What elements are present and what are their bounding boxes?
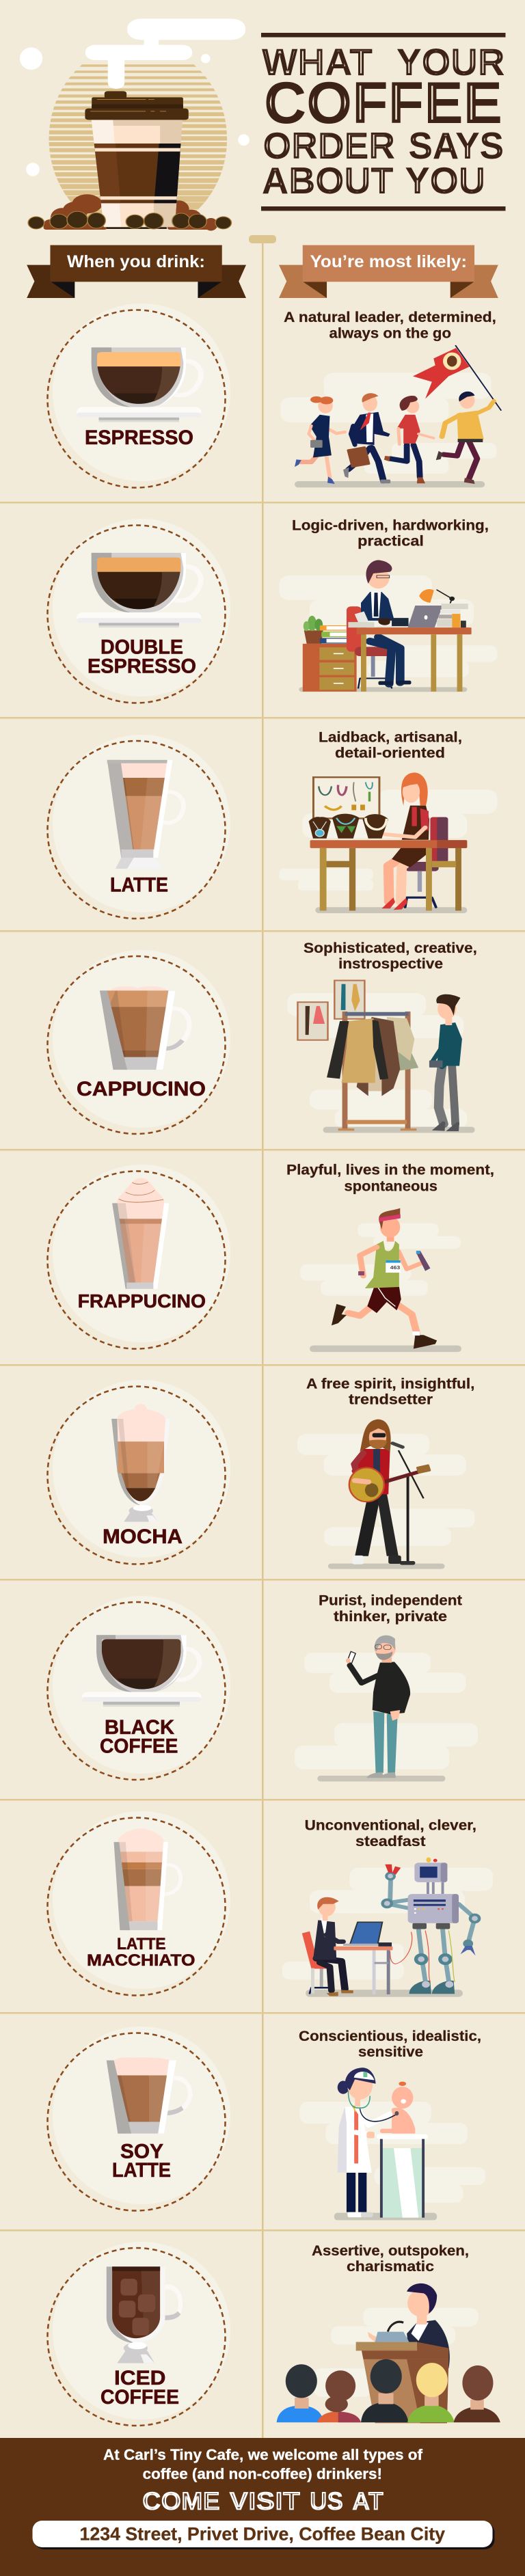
- man with flag: [444, 442, 462, 456]
- label: double espresso: DOUBLE: [100, 636, 183, 658]
- personality text: iced coffee: [312, 2243, 469, 2275]
- label: cappucino: CAPPUCINO: [77, 1078, 206, 1100]
- illustration: office worker at desk: [279, 560, 497, 692]
- label: iced coffee: [100, 2367, 179, 2409]
- chair: [347, 606, 362, 652]
- woman: [299, 456, 317, 462]
- icon: soy latte glass: [107, 2057, 190, 2134]
- personality text: black coffee: [319, 1593, 462, 1625]
- title line 4: [262, 159, 485, 202]
- personality text: frappucino: [286, 1163, 494, 1194]
- label: soy latte: [112, 2140, 171, 2182]
- guitar: [375, 1471, 422, 1484]
- row: double espresso: [48, 518, 497, 703]
- footer heading: COME: [142, 2487, 220, 2515]
- row dividers: [0, 502, 525, 2231]
- label: frappucino: FRAPPUCINO: [78, 1290, 206, 1312]
- row: frappucino: [48, 1163, 494, 1352]
- row: iced coffee: [48, 2242, 500, 2426]
- mic stand: [407, 1476, 409, 1562]
- torso: [365, 1240, 399, 1288]
- personality text: soy latte: Conscientious, idealistic,: [299, 2029, 481, 2044]
- ribbon: when you drink: When you drink:: [67, 252, 205, 271]
- title: [261, 33, 506, 211]
- title line 1: [262, 40, 504, 83]
- personality text: espresso: A natural leader, determined,: [284, 310, 496, 325]
- personality text: latte: Laidback, artisanal,: [319, 729, 462, 745]
- row: soy latte: [48, 2026, 485, 2220]
- footer intro text: coffee (and non-coffee) drinkers!: [143, 2465, 382, 2482]
- head: [381, 1655, 392, 1663]
- icon: mocha glass: [111, 1404, 170, 1521]
- row: cappucino: [48, 940, 477, 1134]
- illustration: speaker at podium with audience: [277, 2283, 500, 2423]
- address pill: 1234 Street, Privet Drive, Coffee Bean City: [79, 2523, 445, 2544]
- desk and laptop: [334, 1947, 393, 1951]
- footer heading: AT: [352, 2487, 383, 2515]
- label: mocha: MOCHA: [103, 1526, 183, 1548]
- coats: [378, 1018, 418, 1070]
- icon: frappucino glass: [112, 1178, 169, 1289]
- badge: black coffee: [48, 1596, 230, 1780]
- personality text: black coffee: thinker, private: [334, 1609, 447, 1625]
- head: [360, 1420, 391, 1452]
- illustration: programmer and robot: [282, 1858, 493, 1997]
- badge: cappucino: [48, 950, 230, 1134]
- arm back: [399, 1251, 420, 1269]
- column divider with cap: [249, 235, 276, 2439]
- table: [310, 840, 467, 848]
- personality text: cappucino: instrospective: [338, 956, 443, 972]
- title line 4: ABOUT: [262, 159, 394, 202]
- badge: soy latte: [48, 2026, 230, 2210]
- icon: latte macchiato glass: [114, 1828, 180, 1930]
- legs: [348, 1303, 375, 1316]
- label: espresso: ESPRESSO: [85, 426, 193, 449]
- label: iced coffee: COFFEE: [100, 2386, 179, 2409]
- label: soy latte: LATTE: [112, 2159, 171, 2182]
- label: black coffee: BLACK: [105, 1716, 174, 1739]
- icon: double espresso cup: [77, 553, 201, 627]
- icon: iced coffee mug: [107, 2266, 180, 2363]
- label: black coffee: COFFEE: [100, 1735, 178, 1758]
- icon: latte glass: [107, 760, 183, 869]
- nurse: [347, 2173, 355, 2212]
- personality text: double espresso: practical: [358, 533, 424, 549]
- robot arms: [390, 1877, 409, 1903]
- personality text: espresso: [284, 310, 496, 341]
- personality text: iced coffee: charismatic: [347, 2259, 434, 2275]
- personality text: latte macchiato: [305, 1818, 476, 1849]
- label: black coffee: [100, 1716, 178, 1758]
- illustration: runner: [300, 1208, 461, 1352]
- label: latte macchiato: LATTE: [117, 1935, 165, 1953]
- badge: double espresso: [48, 519, 230, 703]
- label: latte macchiato: [87, 1935, 196, 1970]
- title line 2: COFFEE: [264, 70, 502, 136]
- title line 1: WHAT: [262, 40, 373, 83]
- badge: frappucino: [48, 1165, 230, 1349]
- speaker: [407, 2320, 450, 2368]
- label: double espresso: ESPRESSO: [88, 655, 196, 677]
- podium: [356, 2342, 417, 2350]
- illustration: guitarist: [297, 1420, 475, 1569]
- personality text: soy latte: sensitive: [358, 2044, 423, 2060]
- label: iced coffee: ICED: [114, 2367, 165, 2389]
- changing table: [382, 2148, 422, 2218]
- man with briefcase: [348, 448, 370, 470]
- rule bottom: [261, 206, 506, 211]
- footer intro text: [103, 2446, 423, 2482]
- row: black coffee: [48, 1593, 478, 1782]
- personality text: black coffee: Purist, independent: [319, 1593, 462, 1609]
- baby: [381, 2128, 412, 2134]
- personality text: cappucino: Sophisticated, creative,: [304, 940, 477, 956]
- ribbon: when you drink: [27, 245, 246, 298]
- footer heading: [142, 2487, 383, 2515]
- audience: [277, 2359, 500, 2422]
- illustration: team running with flag: [280, 345, 501, 487]
- personality text: latte macchiato: Unconventional, clever,: [305, 1818, 476, 1834]
- bean pile backdrop: [44, 194, 217, 231]
- personality text: latte: detail-oriented: [335, 746, 445, 761]
- label: latte: LATTE: [110, 874, 168, 897]
- personality text: mocha: [306, 1377, 474, 1408]
- personality text: soy latte: [299, 2029, 481, 2060]
- footer heading: VISIT: [230, 2487, 300, 2515]
- busts: [309, 817, 331, 839]
- title line 1: YOUR: [396, 40, 504, 83]
- robot legs: [418, 1929, 426, 1985]
- cup body: [92, 120, 183, 227]
- person: [388, 858, 402, 901]
- label: double espresso: [88, 636, 196, 677]
- illustration: runner: 463: [390, 1265, 401, 1271]
- illustration: fashion designer with clothes rack: [287, 981, 475, 1133]
- badge: espresso: [48, 303, 230, 488]
- desk: [357, 627, 472, 634]
- books and lamp: [442, 604, 468, 609]
- personality text: cappucino: [304, 940, 477, 972]
- personality text: latte macchiato: steadfast: [355, 1834, 426, 1849]
- row: latte: [48, 729, 497, 919]
- footer panel: [0, 2438, 525, 2576]
- row: espresso: [48, 303, 501, 488]
- title line 4: YOU: [405, 159, 485, 202]
- rule top: [261, 33, 506, 37]
- lid: [85, 91, 189, 120]
- chair and programmer: [302, 1931, 328, 1968]
- legs: [355, 1493, 381, 1556]
- badge: latte macchiato: [48, 1811, 230, 1996]
- badge: latte: [48, 735, 230, 919]
- ribbon: you're most likely: [279, 245, 498, 298]
- title line 3: SAYS: [409, 124, 504, 167]
- woman in red: [390, 445, 407, 461]
- badge: iced coffee: [48, 2242, 230, 2426]
- cabinet: [303, 644, 357, 692]
- person: [439, 1066, 444, 1124]
- person: [370, 641, 392, 684]
- personality text: frappucino: spontaneous: [345, 1178, 438, 1194]
- coffee beans: [28, 211, 231, 229]
- personality text: double espresso: Logic-driven, hardworking,: [292, 518, 489, 533]
- personality text: mocha: A free spirit, insightful,: [306, 1377, 474, 1392]
- personality text: latte: [319, 729, 462, 761]
- title line 3: [262, 124, 504, 167]
- address pill: [33, 2521, 495, 2549]
- footer heading: US: [310, 2487, 343, 2515]
- personality text: double espresso: [292, 518, 489, 549]
- footer intro text: At Carl’s Tiny Cafe, we welcome all types of: [103, 2446, 423, 2463]
- badge: mocha: [48, 1380, 230, 1564]
- personality text: frappucino: Playful, lives in the moment,: [286, 1163, 494, 1178]
- icon: black coffee cup: [82, 1635, 201, 1707]
- icon: espresso cup: [77, 347, 201, 422]
- label: latte macchiato: MACCHIATO: [87, 1951, 196, 1970]
- row: latte macchiato: [48, 1811, 493, 1997]
- striped sun behind cup: [49, 64, 227, 217]
- label: soy latte: SOY: [120, 2140, 163, 2163]
- legs: [373, 1711, 384, 1773]
- personality text: iced coffee: Assertive, outspoken,: [312, 2243, 469, 2259]
- header illustration: takeaway coffee cup: [20, 18, 250, 231]
- personality text: espresso: always on the go: [329, 325, 451, 341]
- icon: cappucino cup: [100, 986, 189, 1070]
- torso: [351, 1449, 390, 1494]
- row: mocha: [48, 1377, 475, 1569]
- chair: [430, 817, 448, 863]
- illustration: nurse with baby: [299, 2067, 485, 2220]
- robot head: [414, 1862, 447, 1882]
- illustration: thinker with phone: [295, 1636, 478, 1782]
- illustration: jewellery maker at table: [279, 772, 497, 913]
- robot torso: [408, 1894, 459, 1923]
- torso: [373, 1662, 410, 1714]
- laptop: [408, 606, 443, 627]
- personality text: mocha: trendsetter: [349, 1392, 433, 1408]
- steam: [20, 18, 250, 176]
- title line 3: ORDER: [262, 124, 395, 167]
- ribbon: you're most likely: You’re most likely:: [310, 252, 467, 271]
